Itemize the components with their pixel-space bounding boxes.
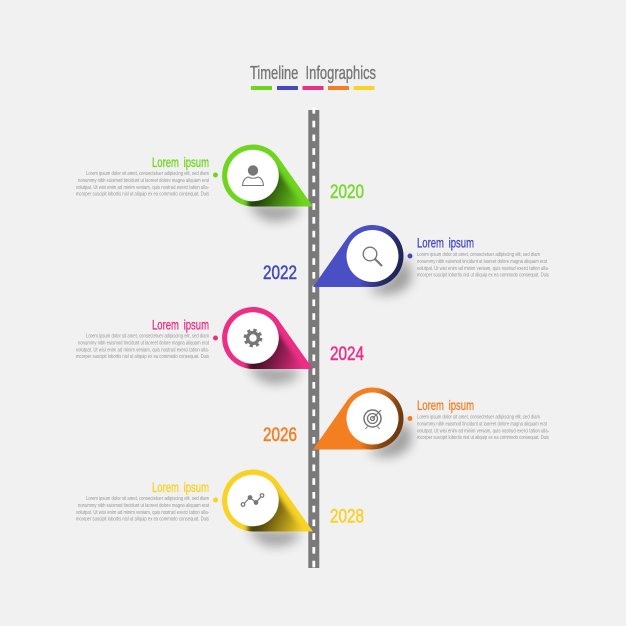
year 2028: 2028: [330, 506, 364, 528]
text block 2024: nonummy nibh euismod tincidunt ut laoreet dolore magna aliquam erat: [78, 340, 210, 346]
text block 2026: nonummy nibh euismod tincidunt ut laoreet dolore magna aliquam erat: [417, 422, 548, 428]
text block 2022: nonummy nibh euismod tincidunt ut laoreet dolore magna aliquam erat: [417, 259, 548, 265]
text block 2026: [408, 397, 549, 441]
text block 2024: Lorem ipsum dolor sit amet, consectetuer adipiscing elit, sed diam: [86, 334, 209, 340]
year 2024: 2024: [330, 343, 364, 365]
text block 2024: volutpat. Ut wisi enim ad minim veniam, quis nostrud exerci tation ulla-: [76, 347, 209, 353]
text block 2028: Lorem ipsum dolor sit amet, consectetuer adipiscing elit, sed diam: [86, 496, 209, 502]
pin 2024: [222, 307, 313, 384]
text block 2020: volutpat. Ut wisi enim ad minim veniam, quis nostrud exerci tation ulla-: [76, 185, 209, 191]
text block 2020: [76, 154, 218, 198]
text block 2020: nonummy nibh euismod tincidunt ut laoreet dolore magna aliquam erat: [78, 178, 210, 184]
text block 2022: Lorem ipsum dolor sit amet, consectetuer adipiscing elit, sed diam: [417, 252, 540, 258]
text block 2024: mcorper suscipit lobortis nisl ut aliquip ex ea commodo consequat. Duis: [76, 354, 209, 360]
text block 2028: volutpat. Ut wisi enim ad minim veniam, quis nostrud exerci tation ulla-: [76, 510, 209, 516]
text block 2022: mcorper suscipit lobortis nisl ut aliquip ex ea commodo consequat. Duis: [417, 272, 549, 278]
text block 2022: [408, 234, 549, 278]
text block 2028: mcorper suscipit lobortis nisl ut aliquip ex ea commodo consequat. Duis: [76, 516, 209, 522]
pin 2020: [222, 145, 313, 222]
icon: magnifier: [363, 247, 382, 266]
text block 2028: nonummy nibh euismod tincidunt ut laoreet dolore magna aliquam erat: [78, 503, 210, 509]
text block 2026: Lorem ipsum: [417, 397, 474, 413]
icon: target: [364, 410, 381, 429]
year 2022: 2022: [263, 262, 297, 284]
year 2026: 2026: [263, 424, 297, 446]
pin 2028: [222, 470, 313, 546]
text block 2022: volutpat. Ut wisi enim ad minim veniam, quis nostrud exerci tation ulla-: [417, 266, 549, 272]
pin 2026: [313, 388, 411, 457]
icon: gear: [245, 330, 261, 346]
text block 2020: Lorem ipsum: [152, 154, 209, 170]
timeline road: [308, 107, 319, 568]
text block 2020: mcorper suscipit lobortis nisl ut aliquip ex ea commodo consequat. Duis: [76, 192, 209, 198]
text block 2024: [76, 316, 218, 360]
colour key bars: [251, 86, 374, 90]
text block 2028: Lorem ipsum: [152, 479, 209, 495]
text block 2022: Lorem ipsum: [417, 234, 474, 250]
icon: line chart: [241, 494, 264, 506]
text block 2026: mcorper suscipit lobortis nisl ut aliquip ex ea commodo consequat. Duis: [417, 435, 549, 441]
text block 2026: Lorem ipsum dolor sit amet, consectetuer adipiscing elit, sed diam: [417, 414, 540, 420]
text block 2026: volutpat. Ut wisi enim ad minim veniam, quis nostrud exerci tation ulla-: [417, 428, 549, 434]
text block 2028: [76, 479, 218, 522]
text block 2024: Lorem ipsum: [152, 316, 209, 332]
icon: person: [242, 165, 264, 186]
title: Timeline Infographics: [250, 63, 376, 83]
year 2020: 2020: [330, 181, 364, 203]
text block 2020: Lorem ipsum dolor sit amet, consectetuer adipiscing elit, sed diam: [86, 171, 209, 177]
pin 2022: [313, 225, 411, 295]
